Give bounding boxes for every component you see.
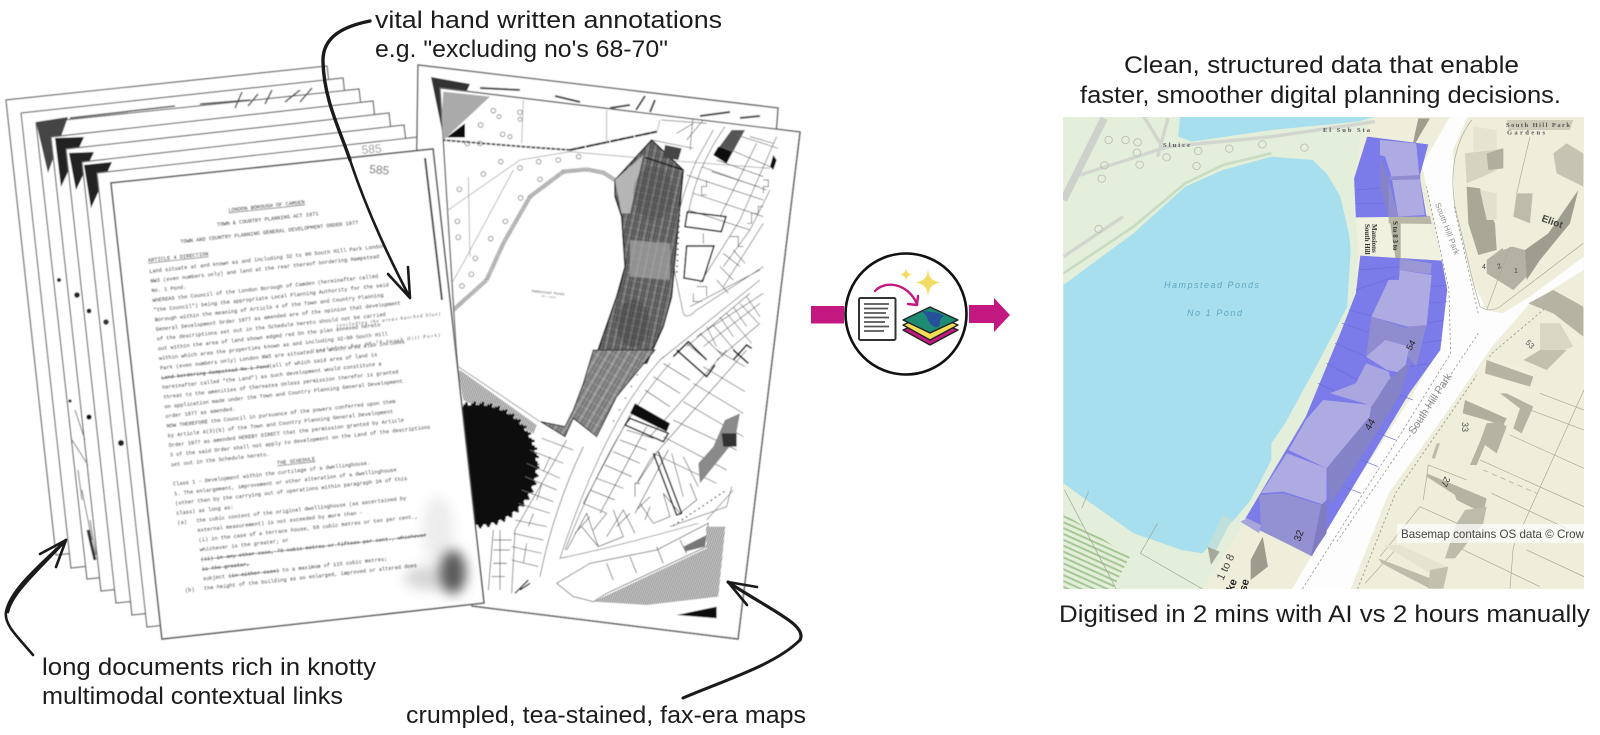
map labels: 44: [1363, 417, 1378, 432]
map labels: S to 8 3 to: [1391, 221, 1399, 251]
document typewritten text: TOWN AND COUNTRY PLANNING GENERAL DEVELOPMENT ORDER 1977: [180, 220, 359, 245]
annotation: hand written notes: vital hand written annotations: [375, 7, 722, 34]
document typewritten text: by Article 4(3)(b) of the Town and Country Planning General Development: [167, 409, 394, 439]
map bottom edge: [472, 132, 800, 639]
document typewritten text: Land bordering Hampstead No 1 Pond: [161, 364, 270, 381]
document typewritten text: Park (even numbers only) London NW3 are situated and which area also includes: [160, 339, 405, 372]
document typewritten text: ARTICLE 4 DIRECTION: [148, 251, 209, 264]
page sheet 5: [66, 113, 439, 603]
document typewritten text: General Development Order 1977 as amended are of the opinion that development: [155, 301, 401, 333]
map base: [1063, 117, 1584, 589]
map labels: ke: [1225, 577, 1240, 593]
icon circle: [846, 254, 966, 374]
map labels: South Hill Park: [1406, 371, 1455, 437]
document typewritten text: Borough within the meaning of Article 4 of the Town and Country Planning: [154, 293, 384, 323]
basemap attribution: Basemap contains OS data © Crow: [1401, 527, 1584, 541]
map labels: 53: [1524, 338, 1537, 351]
document typewritten text: class) as long as:: [176, 505, 234, 517]
map labels: South Hill Park: [1433, 201, 1462, 257]
map labels: 1: [1514, 268, 1518, 275]
document typewritten text: out within the area of land shown edged red On the plan annexed hereto: [158, 322, 381, 352]
map: highlighted blue plots and 3D buildings: [1240, 137, 1447, 556]
document typewritten text: No. 1 Pond.: [151, 285, 187, 294]
arrow: incoming bar: [811, 306, 844, 324]
document typewritten text: threat to the amenities of thereatea Unless permission therefor is granted: [163, 369, 399, 401]
map: park, pond, road shapes: [1063, 117, 1584, 589]
document typewritten text: (all of which said area of land is: [269, 352, 378, 370]
document typewritten text: 1. The enlargement, improvement or other alteration of a dwellinghouse: [174, 467, 397, 497]
map labels: 4: [1482, 264, 1486, 271]
document typewritten text: TOWN & COUNTRY PLANNING ACT 1971: [217, 211, 319, 228]
punched holes and edge marks: [57, 278, 151, 560]
arrow: caption to map: [683, 582, 801, 698]
map labels: El Sub Sta: [1323, 127, 1371, 134]
map labels: se: [1237, 578, 1252, 593]
annotation: long documents: [42, 654, 376, 710]
document typewritten text: (other than by the carrying out of operations within paragraph 2A of this: [175, 476, 408, 507]
map: upper half linework: Hampstead Ponds: [531, 289, 565, 297]
map: mansions strip: [1388, 216, 1442, 260]
icon: map layers: [903, 307, 958, 345]
document typewritten text: Class 1 - Development within the curtilage of a dwellinghouse.: [173, 460, 371, 488]
document typewritten text: order 1977 as amended.: [165, 406, 236, 420]
map labels: 54: [1404, 338, 1418, 352]
arrow: annotation to document margin: [323, 21, 410, 298]
process icon with arrows: [811, 254, 1010, 374]
document typewritten text: (i) in the case of a terrace house, 50 cubic metres or ten per cent.,: [198, 514, 418, 544]
document typewritten text: Order 1977 as amended HEREBY DIRECT that the permission granted by Article: [168, 418, 404, 449]
page sheet 7: [97, 137, 468, 627]
document typewritten text: THE SCHEDULE: [277, 457, 316, 467]
map labels: 1 to 8: [1215, 552, 1237, 582]
document typewritten text: "the Council") being the appropriate Local Planning Authority for the said: [153, 282, 389, 314]
handwritten margin annotations: [313, 312, 441, 354]
page sheet 6: [82, 125, 454, 615]
document typewritten text: whichever is the greater; or: [199, 538, 289, 553]
map labels: South Hill: [1363, 224, 1371, 255]
map labels: [1163, 122, 1570, 593]
map labels: Sluice: [1163, 142, 1190, 149]
heading: clean structured data: faster, smoother digital planning decisions.: [1080, 82, 1561, 109]
document typewritten text: subject (in either case) to a maximum of 115 cubic metres;: [203, 556, 388, 582]
document typewritten text: the height of the building as so enlarged, improved or altered does: [204, 563, 417, 592]
page sheet 1: [6, 66, 377, 555]
map: upper half linework: (No 1 pond): [541, 295, 556, 299]
document typewritten text: on application made under the Town and Country Planning General Development: [164, 379, 403, 410]
document typewritten text: NOW THEREFORE the Council in pursuance of the powers conferred upon them: [166, 399, 396, 430]
arrow: outgoing: [969, 298, 1010, 332]
annotation: hand written notes: [375, 7, 722, 63]
black sunburst stamp: [462, 401, 540, 530]
map drawing: [414, 92, 778, 618]
map labels: South Hill Park: [1506, 122, 1570, 129]
map labels: Mansions: [1370, 224, 1378, 253]
map labels: 2: [1496, 263, 1502, 271]
document typewritten text: WHEREAS the Council of the London Borough of Camden (hereinafter called: [152, 274, 379, 304]
annotation: hand written notes: e.g. "excluding no's 68-70": [375, 36, 668, 63]
document typewritten text: (b): [185, 587, 195, 594]
document typewritten text: LONDON BOROUGH OF CAMDEN: [228, 200, 305, 214]
map: lower half linework: [414, 350, 748, 618]
document typewritten text: hereinafter called "the Land") as such development would constitute a: [162, 361, 383, 391]
front page sheet: [111, 149, 484, 639]
document typewritten text: within which area the properties known as and including 32-90 South Hill: [159, 331, 388, 362]
document typewritten text: [143, 189, 446, 594]
page sheet 3: [36, 88, 409, 579]
handwritten margin annotations: (excluding the areas hatched blue): [337, 312, 441, 329]
document typewritten text: (a): [177, 519, 187, 526]
annotation: long documents: long documents rich in knotty: [42, 654, 376, 681]
annotation: crumpled maps: crumpled, tea-stained, fax-era maps: [406, 702, 806, 729]
page-number stamp: 585: [369, 162, 390, 178]
scan shadow at right margin: [425, 158, 442, 300]
tea stain: [404, 496, 466, 594]
document typewritten text: Land situate at and known as and including 32 to 90 South Hill Park London: [149, 244, 385, 275]
handwritten margin annotations: (excluding Nos 68-70 South Hill Park): [313, 333, 441, 354]
map: upper half linework: [440, 92, 778, 363]
page sheet 7: 585: [361, 141, 383, 157]
document typewritten text: (ii) in any other case, 70 cubic metres or fifteen per cent., whichever: [200, 533, 427, 563]
panel: digitised 3D map: [1063, 117, 1584, 593]
arrow: caption to page stack: [6, 540, 66, 655]
map labels: 32: [1292, 528, 1307, 543]
document typewritten text: of the descriptions set out in the Schedule hereto should not be carried: [157, 312, 386, 343]
document typewritten text: NW3 (even numbers only) and land at the rear thereof bordering Hampstead: [150, 254, 380, 285]
page sheet 4: [51, 101, 423, 591]
caption: speed comparison: Digitised in 2 mins with AI vs 2 hours manually: [1059, 601, 1590, 628]
heading: clean structured data: [1080, 52, 1561, 109]
document typewritten text: is the greater,: [202, 562, 250, 573]
map labels: Hampstead Ponds: [1164, 280, 1260, 290]
front map sheet: [440, 88, 800, 639]
icon: sparkles: [900, 268, 941, 297]
map labels: No 1 Pond: [1187, 308, 1243, 318]
annotation: long documents: multimodal contextual links: [42, 683, 343, 710]
document typewritten text: set out in the Schedule hereto.: [171, 452, 270, 468]
panel: scanned planning maps: [411, 65, 800, 639]
map labels: 27: [1439, 475, 1452, 488]
page sheet 2: [21, 78, 393, 568]
map: wedge buildings: [1412, 118, 1583, 358]
map labels: Gardens: [1507, 130, 1545, 136]
icon: document: [859, 298, 896, 340]
panel: stack of scanned document pages: [6, 66, 468, 627]
map: lower-right plots and buildings: [1365, 350, 1584, 589]
document typewritten text: 3 of the said Order shall not apply to development on the Land of the descriptions: [170, 425, 431, 459]
document typewritten text: external measurement) is not exceeded by more than -: [197, 510, 363, 534]
map labels: Eliot: [1540, 213, 1565, 231]
heading: clean structured data: Clean, structured data that enable: [1124, 52, 1519, 79]
back map sheet: [411, 65, 778, 600]
panel: front page of the Article 4 direction: [111, 149, 484, 639]
icon: transform arrow: [875, 285, 918, 305]
map labels: 33: [1460, 422, 1470, 432]
document typewritten text: the cubic content of the original dwellinghouse (as ascertained by: [196, 496, 407, 524]
